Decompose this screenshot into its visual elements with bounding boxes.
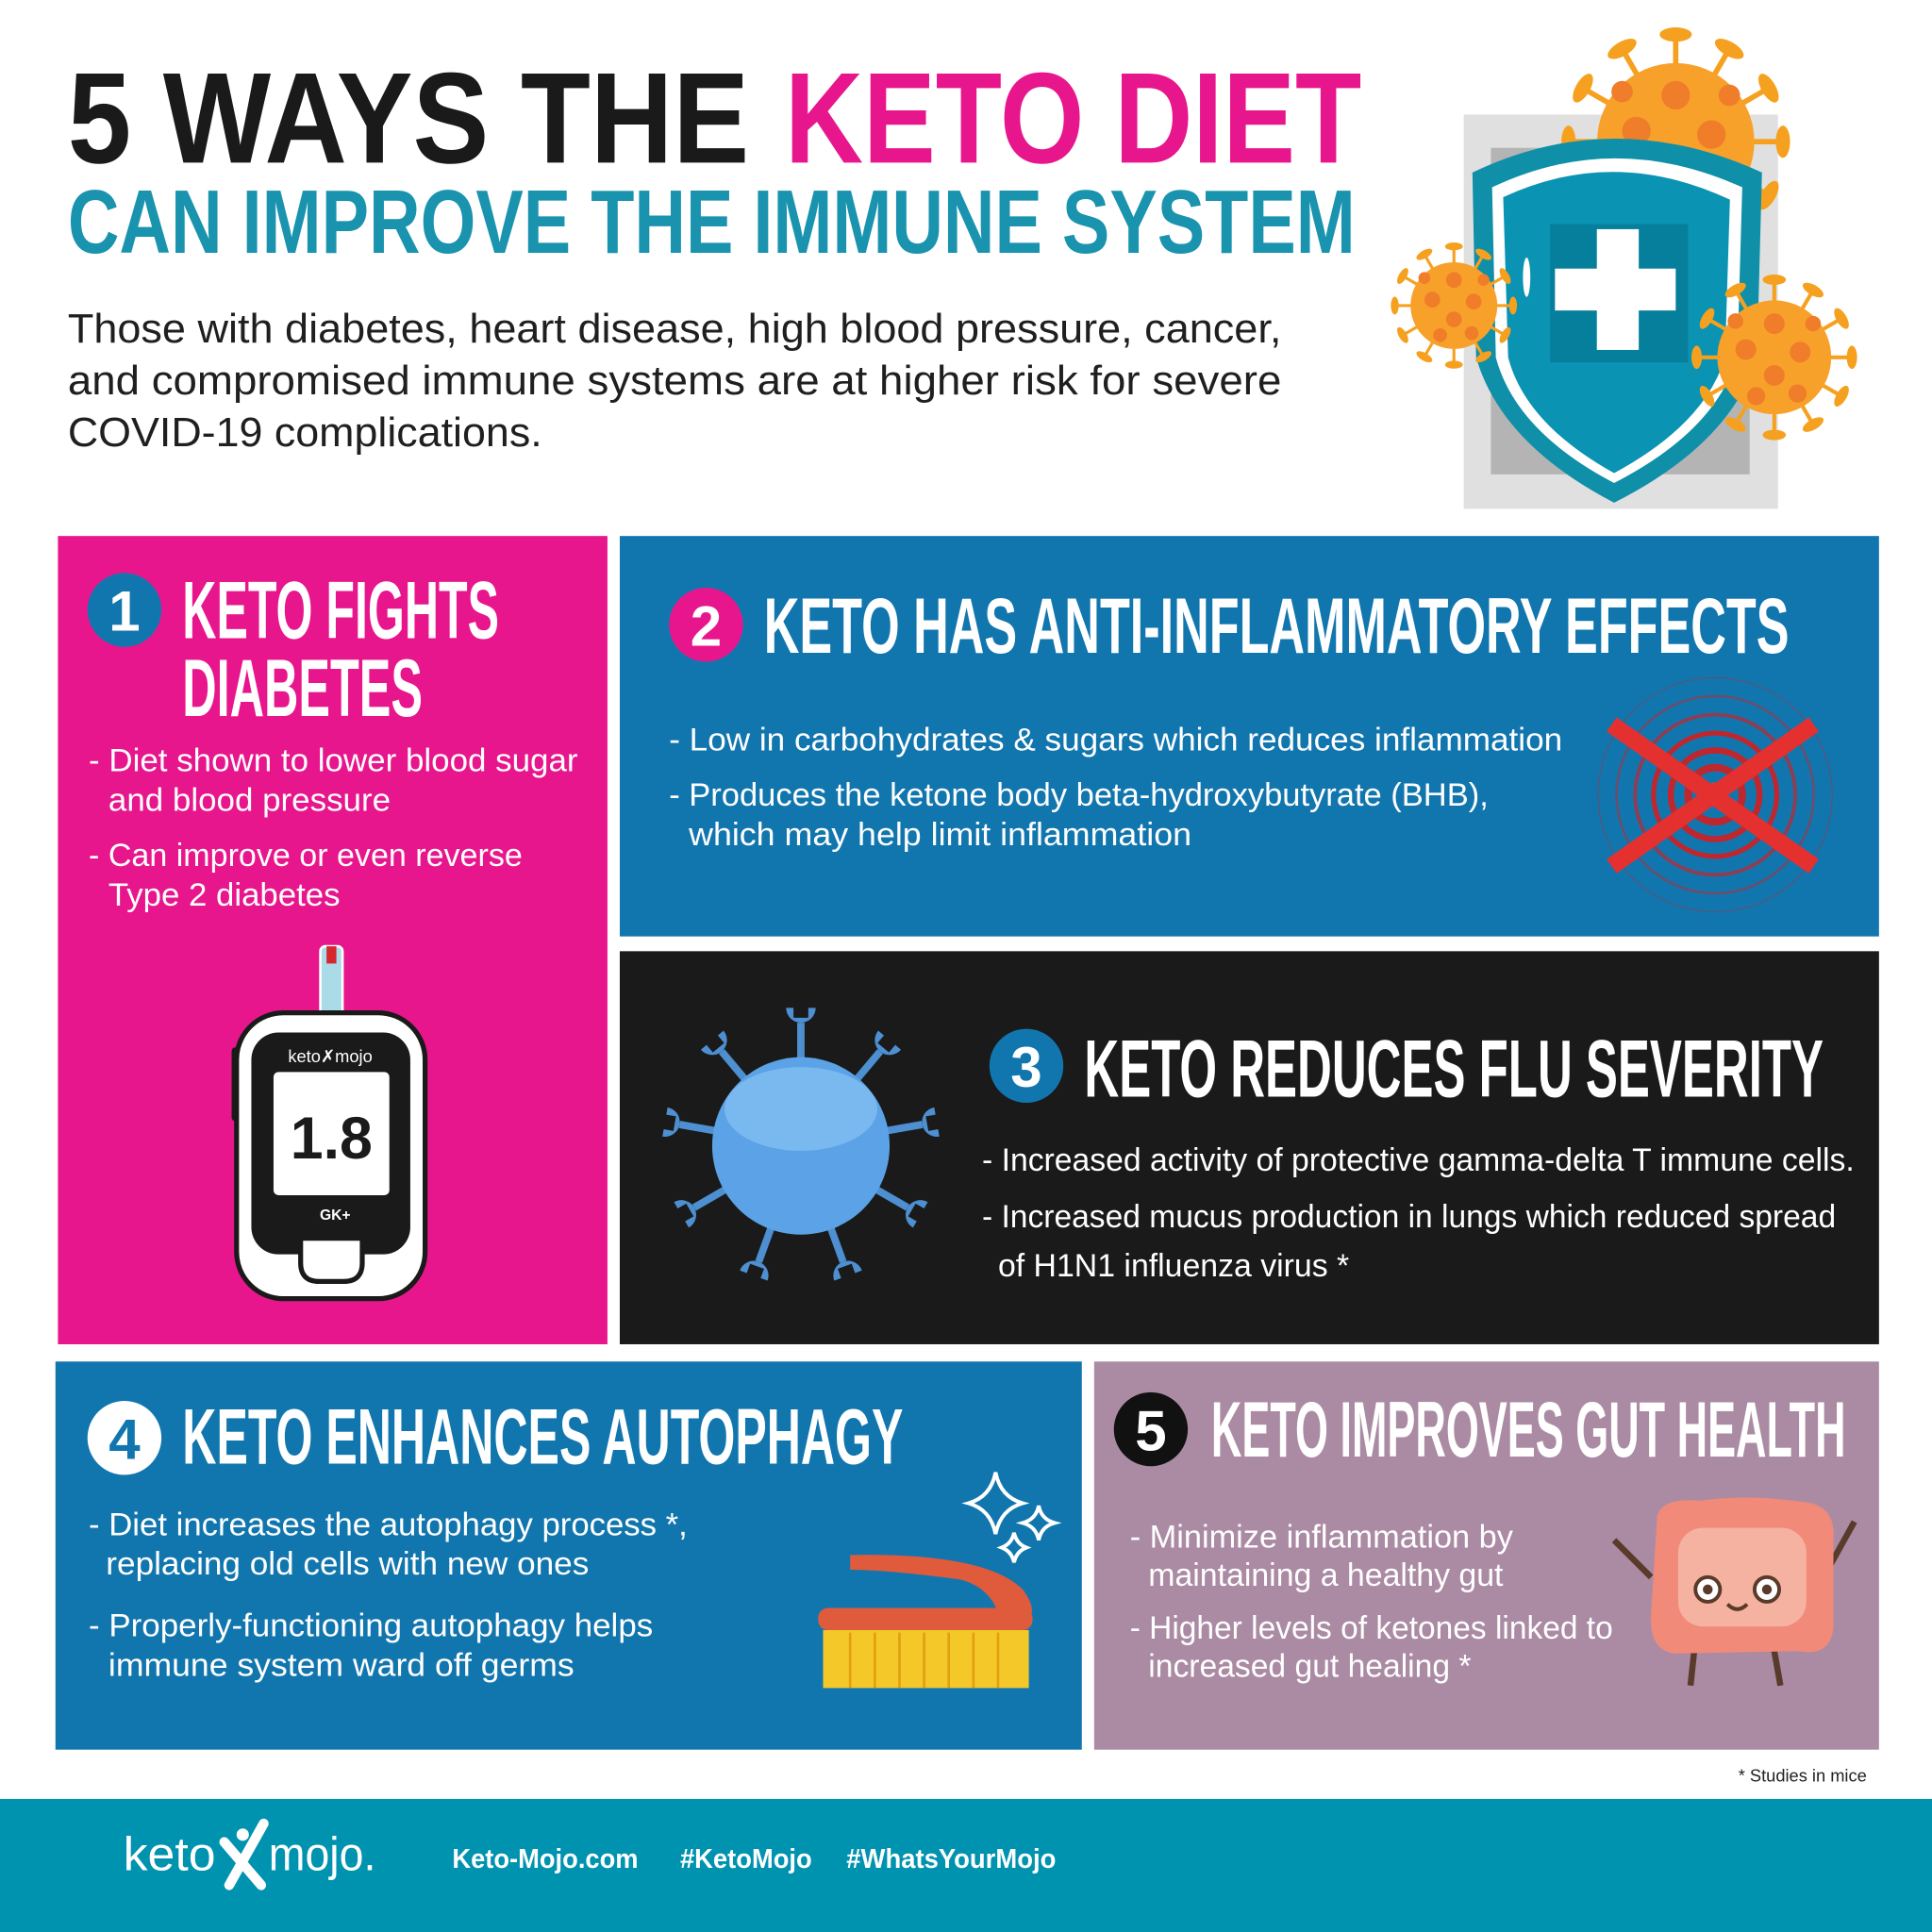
icon: glucose meter: GK+ — [320, 1208, 351, 1224]
icon: glucose meter: 1.8 — [291, 1106, 373, 1172]
icon: shield with viruses — [1391, 27, 1857, 508]
bullets 1: - Can improve or even reverse — [89, 838, 523, 874]
bullets 3: - Increased activity of protective gamma-delta T immune cells. — [982, 1142, 1855, 1178]
footnote: * Studies in mice — [1739, 1766, 1867, 1786]
bullets 1: and blood pressure — [108, 782, 391, 818]
bullets 2 — [669, 722, 1562, 853]
subtitle: CAN IMPROVE THE IMMUNE SYSTEM — [68, 173, 1356, 273]
bullets 5: increased gut healing * — [1148, 1649, 1472, 1685]
icon: glucose meter: keto✗mojo — [288, 1046, 373, 1066]
bullets 3 — [982, 1142, 1855, 1284]
bullets 4: replacing old cells with new ones — [106, 1546, 589, 1582]
intro paragraph: COVID-19 complications. — [68, 410, 542, 456]
bullets 4: immune system ward off germs — [108, 1647, 575, 1683]
bullets 1: Type 2 diabetes — [108, 877, 340, 913]
footer — [0, 1799, 1932, 1932]
number badge 5: 5 — [1135, 1399, 1167, 1462]
number badge 3 — [990, 1029, 1063, 1103]
bullets 5: - Minimize inflammation by — [1130, 1519, 1513, 1555]
intro paragraph: and compromised immune systems are at higher risk for severe — [68, 358, 1281, 404]
icon: glucose meter — [232, 946, 425, 1299]
icon: gut character — [1614, 1497, 1855, 1686]
footer links: Keto-Mojo.com — [452, 1844, 639, 1874]
number badge 4 — [88, 1401, 161, 1474]
heading 4: KETO ENHANCES AUTOPHAGY — [182, 1392, 903, 1481]
heading 1: DIABETES — [182, 643, 423, 734]
panel: autophagy — [56, 1361, 1082, 1750]
bullets 4 — [89, 1507, 688, 1683]
logo: keto — [124, 1828, 216, 1881]
footer links: #KetoMojo — [680, 1844, 812, 1874]
number badge 3: 3 — [1010, 1036, 1042, 1099]
bullets 2: - Low in carbohydrates & sugars which reduces inflammation — [669, 722, 1562, 758]
panel: flu severity — [620, 951, 1879, 1344]
bullets 1 — [89, 743, 578, 913]
number badge 1: 1 — [108, 580, 141, 643]
bullets 4: - Properly-functioning autophagy helps — [89, 1608, 653, 1644]
bullets 1: - Diet shown to lower blood sugar — [89, 743, 578, 779]
number badge 1 — [88, 573, 161, 647]
bullets 5: - Higher levels of ketones linked to — [1130, 1610, 1613, 1646]
title — [68, 46, 1361, 191]
heading 1 — [182, 566, 499, 734]
number badge 2 — [669, 588, 743, 661]
heading 1: KETO FIGHTS — [182, 566, 499, 657]
intro paragraph: Those with diabetes, heart disease, high blood pressure, cancer, — [68, 307, 1281, 352]
icon: brush with sparkles — [818, 1473, 1055, 1688]
bullets 3: - Increased mucus production in lungs which reduced spread — [982, 1199, 1836, 1235]
logo — [124, 1824, 375, 1885]
logo: mojo. — [269, 1828, 375, 1881]
title: 5 WAYS THE — [68, 46, 749, 191]
bullets 4: - Diet increases the autophagy process *, — [89, 1507, 688, 1542]
number badge 4: 4 — [108, 1407, 141, 1471]
title: KETO DIET — [785, 46, 1361, 191]
footer links: #WhatsYourMojo — [846, 1844, 1056, 1874]
bullets 5 — [1130, 1519, 1613, 1685]
number badge 2: 2 — [691, 594, 722, 658]
panel: keto fights diabetes — [58, 536, 608, 1344]
icon: virus — [662, 1008, 940, 1281]
bullets 2: which may help limit inflammation — [688, 817, 1191, 853]
bullets 2: - Produces the ketone body beta-hydroxybutyrate (BHB), — [669, 777, 1489, 813]
number badge 5 — [1114, 1392, 1188, 1466]
bullets 3: of H1N1 influenza virus * — [998, 1248, 1349, 1284]
panel: gut health — [1094, 1361, 1879, 1750]
intro paragraph — [68, 307, 1281, 456]
panel: anti-inflammatory — [620, 536, 1879, 937]
bullets 5: maintaining a healthy gut — [1148, 1557, 1504, 1593]
icon: inflammation crossed — [1598, 677, 1832, 912]
footer links — [452, 1844, 1056, 1874]
